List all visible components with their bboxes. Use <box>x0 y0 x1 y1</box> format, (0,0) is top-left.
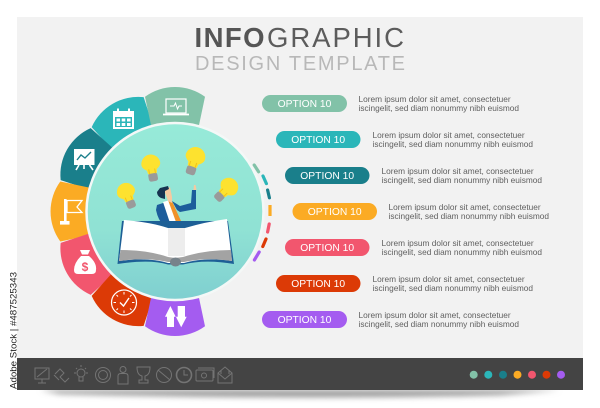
title: INFO <box>194 22 264 53</box>
open book <box>118 219 234 266</box>
businessman <box>156 185 196 226</box>
option 3: OPTION 10 <box>300 171 354 182</box>
footer icon: clock <box>176 368 192 382</box>
option 7 <box>262 310 519 329</box>
option 4: Lorem ipsum dolor sit amet, consectetuer <box>388 202 541 212</box>
bulb 2 <box>140 153 163 183</box>
bulb 1 <box>114 180 141 211</box>
stock credit: Adobe Stock | #487525343 <box>8 272 20 389</box>
option 2: OPTION 10 <box>291 135 345 146</box>
subtitle: DESIGN TEMPLATE <box>195 53 405 75</box>
bulb 4 <box>210 174 242 206</box>
footer icon: bulb <box>74 365 88 381</box>
option 3: Lorem ipsum dolor sit amet, consectetuer <box>382 166 534 176</box>
footer icon: presentation <box>35 368 49 383</box>
petal: flag <box>51 182 91 242</box>
option 4 <box>292 202 549 221</box>
option 3 <box>285 166 542 185</box>
option 5: iscingelit, sed diam nonummy nibh euismod <box>382 247 542 257</box>
option 2 <box>276 130 533 149</box>
colour dots <box>470 371 565 379</box>
petal ring <box>51 87 205 336</box>
option 7: iscingelit, sed diam nonummy nibh euismod <box>358 319 519 329</box>
petal: calendar <box>87 89 159 154</box>
progress dashes <box>254 165 270 260</box>
petal: chart <box>52 123 117 195</box>
option 1: iscingelit, sed diam nonummy nibh euismod <box>358 103 519 113</box>
option 3: iscingelit, sed diam nonummy nibh euismod <box>382 175 542 185</box>
option 2: Lorem ipsum dolor sit amet, consectetuer <box>372 130 525 140</box>
option 7: OPTION 10 <box>278 315 332 326</box>
icon: laptop <box>163 99 189 114</box>
option 6: Lorem ipsum dolor sit amet, consectetuer <box>372 274 525 284</box>
icon: clock <box>112 290 136 315</box>
petal: arrows <box>145 296 205 336</box>
option 6: OPTION 10 <box>291 279 345 290</box>
option 2: iscingelit, sed diam nonummy nibh euismod <box>372 139 533 149</box>
option 5: Lorem ipsum dolor sit amet, consectetuer <box>382 238 534 248</box>
footer icon: person <box>118 366 128 384</box>
icon: presentation chart <box>74 149 94 170</box>
option 6: iscingelit, sed diam nonummy nibh euismod <box>372 283 533 293</box>
light bulbs <box>114 144 242 211</box>
footer bar <box>17 358 583 390</box>
footer icons <box>35 365 232 384</box>
option 7: Lorem ipsum dolor sit amet, consectetuer <box>358 310 511 320</box>
footer icon: mail <box>218 367 232 383</box>
option 4: iscingelit, sed diam nonummy nibh euismod <box>388 211 549 221</box>
icon: up and down arrows <box>165 306 187 327</box>
petal: clock <box>87 269 159 334</box>
option 1: OPTION 10 <box>278 99 332 110</box>
footer icon: target <box>96 368 110 382</box>
footer icon: banknote <box>196 368 214 381</box>
icon: calendar <box>113 108 134 129</box>
bulb 3 <box>180 144 208 178</box>
petal: money <box>52 228 117 300</box>
option 6 <box>276 274 533 293</box>
petal: laptop <box>145 87 205 128</box>
option 4: OPTION 10 <box>308 207 362 218</box>
bar shadow <box>40 390 560 397</box>
option 5: OPTION 10 <box>300 243 354 254</box>
footer icon: trophy <box>137 367 150 383</box>
option 5 <box>285 238 542 257</box>
icon: money bag <box>74 250 96 274</box>
footer icon: paper clips <box>54 369 69 382</box>
background panel <box>17 17 583 358</box>
footer icon: pie <box>156 368 172 382</box>
icon: money bag: $ <box>82 260 89 274</box>
option 1 <box>262 94 519 113</box>
central circle <box>86 123 264 300</box>
option 1: Lorem ipsum dolor sit amet, consectetuer <box>358 94 511 104</box>
title <box>194 22 404 53</box>
icon: flag <box>60 199 82 225</box>
title: GRAPHIC <box>267 22 404 53</box>
